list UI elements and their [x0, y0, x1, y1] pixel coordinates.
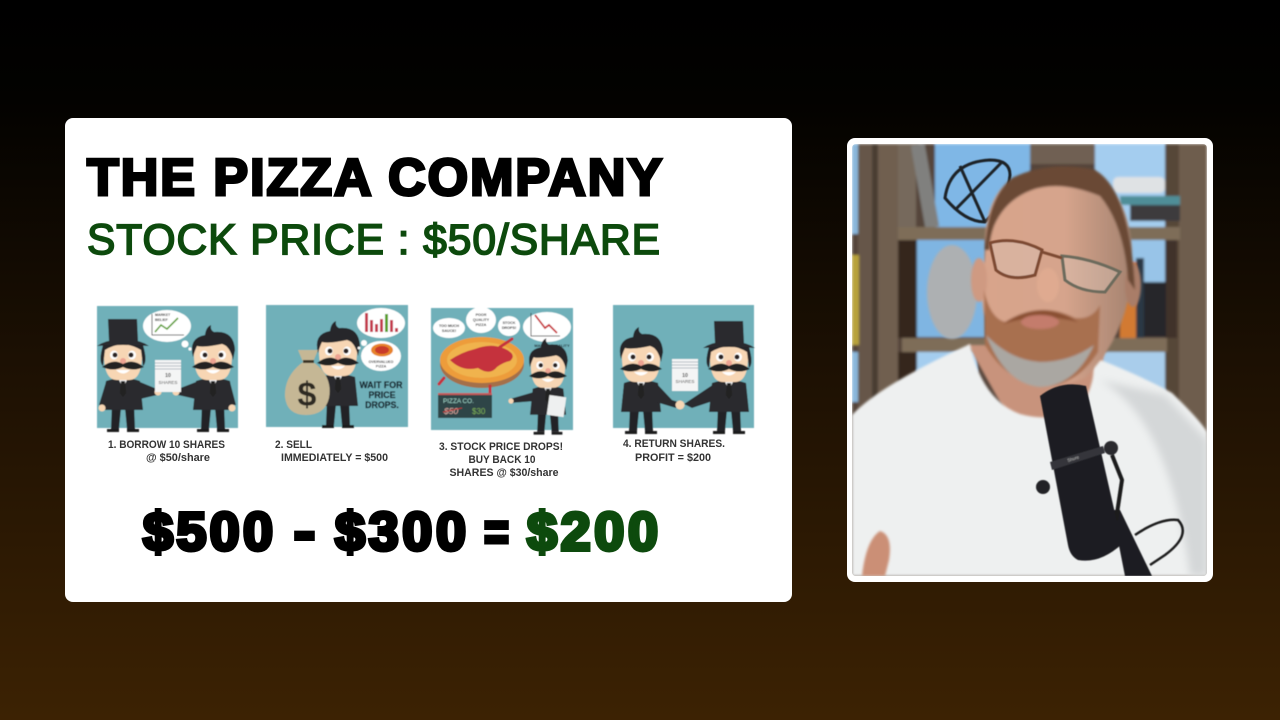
icon: speech bubbles: SAUCE!: [442, 329, 456, 333]
panel: presenter photo frame: [847, 138, 1213, 582]
caption: step 3: SHARES @ $30/share: [450, 467, 558, 479]
equation: profit calculation: =: [484, 502, 509, 562]
icon: stock ticker: $30: [472, 407, 486, 416]
icon: bar chart thought bubble: [357, 308, 405, 338]
icon: 10 shares document: SHARES: [159, 380, 177, 385]
caption: step 4: [623, 438, 725, 464]
panel: step 3 illustration: [431, 307, 573, 435]
caption: step 1: 1. BORROW 10 SHARES: [108, 439, 225, 451]
text: wait for price drops: DROPS.: [365, 400, 399, 410]
caption: step 2: 2. SELL: [275, 439, 312, 451]
caption: step 1: @ $50/share: [146, 452, 210, 464]
photo: shirt shading: [1100, 380, 1207, 576]
figure: lender with top hat: [97, 319, 162, 432]
figure: seller: [317, 321, 360, 428]
icon: stock ticker: [438, 393, 492, 418]
icon: stock ticker: $50: [443, 406, 458, 416]
text: wait for price drops: PRICE: [369, 390, 396, 400]
caption: step 2: [275, 439, 388, 464]
icon: market belief thought bubble: [143, 310, 192, 351]
photo: bookshelf background: [852, 143, 1207, 576]
caption: step 3: [439, 441, 563, 479]
subheading: stock price: STOCK PRICE : $50/SHARE: [87, 217, 660, 264]
icon: 10 shares document: 10: [682, 373, 688, 379]
icon: pizza: [439, 337, 524, 392]
caption: step 3: BUY BACK 10: [468, 454, 536, 466]
panel: slide card: [65, 118, 792, 602]
figure: borrower: [172, 325, 236, 432]
photo: wire sculpture: [945, 160, 1010, 222]
icon: market reality bubble: [523, 312, 571, 348]
photo: microphone: Shure: [1067, 454, 1080, 463]
icon: overvalued pizza bubble: PIZZA: [376, 364, 387, 368]
equation: profit calculation: $200: [527, 502, 658, 562]
icon: 10 shares document: SHARES: [676, 379, 694, 384]
icon: money bag: [285, 350, 330, 415]
figure: returning borrower: [620, 327, 678, 434]
icon: speech bubbles: QUALITY: [473, 318, 490, 322]
text: wait for price drops: WAIT FOR: [359, 380, 403, 390]
caption: step 4: PROFIT = $200: [635, 452, 711, 464]
icon: overvalued pizza bubble: OVERVALUED: [369, 360, 394, 364]
photo: white t-shirt: [852, 344, 1207, 576]
equation: profit calculation: $500: [143, 502, 273, 562]
icon: speech bubbles: POOR: [476, 313, 487, 317]
equation: profit calculation: [143, 502, 658, 562]
icon: 10 shares document: [155, 360, 181, 392]
photo: raised hand: [862, 531, 890, 576]
photo: neck: [968, 345, 1105, 428]
photo: chair headrest: [927, 245, 977, 339]
photo: microphone: [1036, 384, 1183, 576]
panel: step 2 illustration: [266, 305, 408, 428]
icon: speech bubbles: DROPS!: [502, 326, 516, 330]
caption: step 3: 3. STOCK PRICE DROPS!: [439, 441, 563, 453]
photo: head: [971, 166, 1141, 387]
panel: step 4 illustration: [613, 305, 755, 434]
equation: profit calculation: $300: [335, 502, 466, 562]
icon: market reality bubble: MARKET REALITY: [534, 343, 570, 348]
caption: step 1: [108, 439, 225, 464]
icon: money bag: $: [298, 376, 317, 414]
icon: speech bubbles: STOCK: [503, 321, 516, 325]
caption: step 4: 4. RETURN SHARES.: [623, 438, 725, 450]
icon: speech bubbles: PIZZA: [476, 323, 487, 327]
icon: overvalued pizza bubble: [358, 340, 401, 371]
figure: pointing trader: [508, 338, 568, 435]
text: wait for price drops: [359, 380, 403, 410]
photo: glasses: [990, 241, 1120, 292]
equation: profit calculation: -: [294, 502, 315, 562]
icon: market belief thought bubble: MARKET: [155, 313, 171, 317]
figure: lender with top hat: [676, 321, 755, 434]
caption: step 2: IMMEDIATELY = $500: [281, 452, 388, 464]
panel: step 1 illustration: [97, 306, 238, 432]
heading: the pizza company: THE PIZZA COMPANY: [87, 149, 662, 207]
icon: speech bubbles: TOO MUCH: [439, 324, 459, 328]
icon: market belief thought bubble: BELIEF: [155, 318, 169, 322]
icon: stock ticker: PIZZA CO.: [443, 398, 474, 405]
icon: 10 shares document: 10: [165, 373, 171, 379]
icon: speech bubbles: [433, 307, 520, 338]
icon: 10 shares document: [672, 359, 698, 391]
